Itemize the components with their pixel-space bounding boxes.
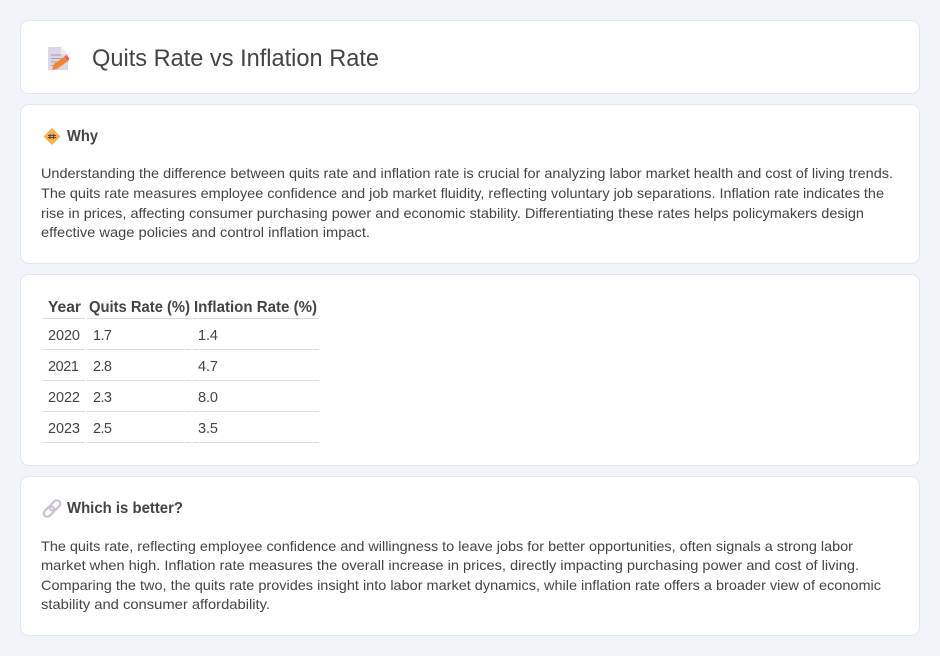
heading: which is better: Which is better? [67, 500, 183, 517]
text block: why explanation: rise in prices, affecting consumer purchasing power and economic stability. Differentiating these rates helps policymakers design [41, 205, 864, 221]
text block: why explanation [41, 165, 893, 240]
table header: Year [48, 299, 81, 316]
text block: comparison: Comparing the two, the quits rate provides insight into labor market dynamics, while inflation rate offers a broader view of economic [41, 577, 881, 593]
panel: why [20, 104, 920, 264]
table row: 2023: 3.5 [198, 421, 218, 437]
table row: 2021: 4.7 [198, 359, 218, 375]
icon: document with pencil [48, 47, 70, 70]
table row: 2023 [48, 421, 218, 437]
panel: header [20, 20, 920, 94]
text block: why explanation: Understanding the difference between quits rate and inflation rate is crucial for analyzing labor market health and cost of living trends. [41, 165, 893, 181]
table row: 2020: 1.4 [198, 328, 218, 344]
table row: 2020: 1.7 [93, 328, 112, 344]
table header: Inflation Rate (%) [194, 299, 317, 316]
text block: comparison: The quits rate, reflecting employee confidence and willingness to leave jobs for better opportunities, often signals a strong labor [41, 538, 853, 554]
text block: why explanation: effective wage policies and control inflation impact. [41, 224, 370, 240]
text block: comparison [41, 538, 881, 612]
table row: 2023: 2.5 [93, 421, 112, 437]
table row: 2021: 2021 [48, 359, 79, 375]
table row: 2022 [48, 390, 218, 406]
table header: Quits Rate (%) [89, 299, 190, 316]
title: Quits Rate vs Inflation Rate [92, 45, 379, 72]
panel: data table [20, 274, 920, 466]
panel: which is better [20, 476, 920, 636]
table row: 2020 [48, 328, 218, 344]
table row: 2022: 2.3 [93, 390, 112, 406]
text block: why explanation: The quits rate measures employee confidence and job market fluidity, reflecting voluntary job separations. Inflation rate indicates the [41, 185, 884, 201]
icon: link [42, 499, 62, 518]
table row: 2023: 2023 [48, 421, 80, 437]
table row: 2021 [48, 359, 218, 375]
table row: 2022: 8.0 [198, 390, 218, 406]
table header [48, 299, 317, 316]
table row: 2021: 2.8 [93, 359, 112, 375]
heading: why: Why [67, 128, 98, 145]
text block: comparison: market when high. Inflation rate measures the overall increase in prices, directly impacting purchasing power and cost of living. [41, 557, 859, 573]
table row: 2022: 2022 [48, 390, 80, 406]
table row: 2020: 2020 [48, 328, 80, 344]
text block: comparison: stability and consumer affordability. [41, 596, 270, 612]
icon: warning diamond [44, 129, 60, 144]
